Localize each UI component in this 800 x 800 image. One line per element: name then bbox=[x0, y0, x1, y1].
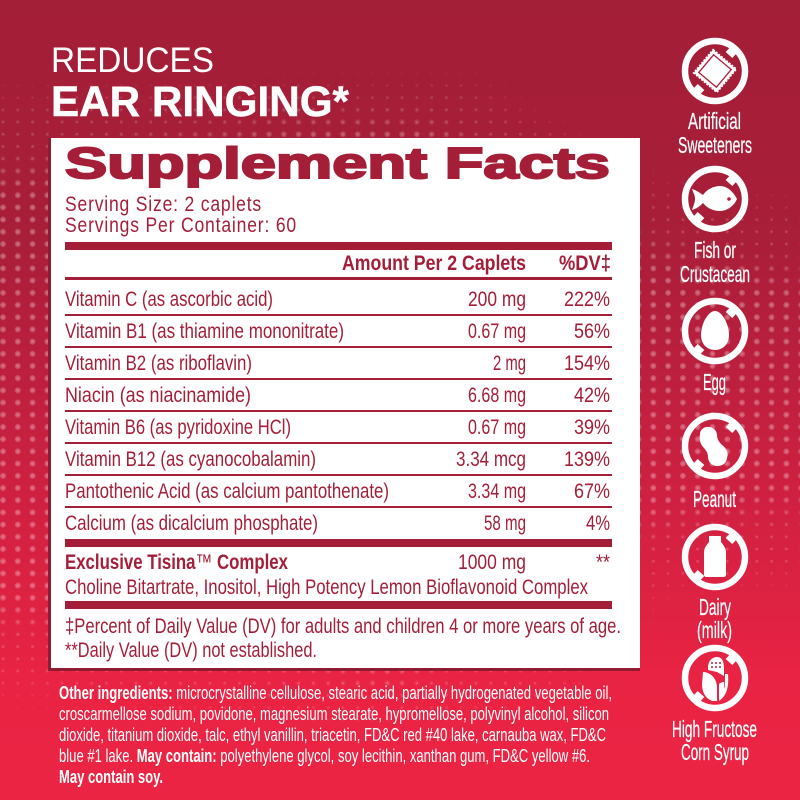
serving information: Serving Size: 2 caplets bbox=[65, 192, 262, 216]
footnotes: **Daily Value (DV) not established. bbox=[65, 638, 317, 662]
nutrient rows: 3.34 mg bbox=[468, 479, 526, 503]
complex row: 1000 mg bbox=[458, 550, 526, 574]
nutrient rows: Calcium (as dicalcium phosphate) bbox=[65, 511, 318, 535]
label: artificial sweeteners: Artificial bbox=[688, 108, 741, 134]
serving information bbox=[65, 192, 297, 237]
nutrient rows: 222% bbox=[564, 287, 610, 311]
nutrient rows: Vitamin C (as ascorbic acid) bbox=[65, 287, 273, 311]
nutrient rows: 2 mg bbox=[493, 351, 526, 375]
heading bbox=[51, 41, 349, 126]
nutrient rows: Pantothenic Acid (as calcium pantothenate) bbox=[65, 479, 389, 503]
nutrient rows: 67% bbox=[574, 479, 610, 503]
label: dairy (milk) bbox=[697, 594, 732, 643]
complex row: Choline Bitartrate, Inositol, High Potency Lemon Bioflavonoid Complex bbox=[65, 575, 588, 599]
label: peanut: Peanut bbox=[693, 486, 736, 512]
complex row: Exclusive Tisina™ Complex bbox=[65, 550, 288, 574]
complex row: ** bbox=[596, 550, 611, 574]
nutrient rows: 58 mg bbox=[484, 511, 526, 535]
complex row bbox=[65, 550, 611, 599]
heading: EAR RINGING* bbox=[51, 78, 349, 126]
footnotes bbox=[65, 614, 621, 662]
label: fish or crustacean bbox=[680, 237, 750, 287]
icon: no artificial sweeteners bbox=[685, 41, 745, 101]
nutrient rows: 42% bbox=[574, 383, 610, 407]
label: fish or crustacean: Crustacean bbox=[680, 261, 750, 287]
label: high fructose corn syrup bbox=[672, 716, 757, 765]
icon: no dairy bbox=[685, 527, 745, 587]
nutrient rows: 56% bbox=[574, 319, 610, 343]
nutrient rows: 6.68 mg bbox=[468, 383, 526, 407]
label: artificial sweeteners bbox=[678, 108, 752, 158]
nutrient rows: 3.34 mcg bbox=[456, 447, 526, 471]
panel title: Supplement Facts bbox=[65, 139, 610, 188]
icon: no high fructose corn syrup bbox=[685, 648, 745, 708]
nutrient rows: Vitamin B6 (as pyridoxine HCl) bbox=[65, 415, 291, 439]
nutrient rows: 200 mg bbox=[468, 287, 526, 311]
nutrient rows: Vitamin B2 (as riboflavin) bbox=[65, 351, 252, 375]
nutrient rows: Niacin (as niacinamide) bbox=[65, 383, 251, 407]
footnotes: ‡Percent of Daily Value (DV) for adults and children 4 or more years of age. bbox=[65, 614, 621, 638]
label: dairy (milk): (milk) bbox=[697, 617, 732, 643]
nutrient rows: Vitamin B1 (as thiamine mononitrate) bbox=[65, 319, 344, 343]
nutrient rows: 39% bbox=[574, 415, 610, 439]
icon: no fish or crustacean bbox=[685, 169, 745, 229]
nutrient rows: 0.67 mg bbox=[468, 415, 526, 439]
nutrient rows: 154% bbox=[564, 351, 610, 375]
table header: Amount Per 2 Caplets bbox=[342, 251, 526, 275]
panel: supplement facts bbox=[48, 138, 640, 671]
nutrient rows bbox=[65, 287, 612, 535]
nutrient rows: 0.67 mg bbox=[468, 319, 526, 343]
nutrient rows: 139% bbox=[564, 447, 610, 471]
label: high fructose corn syrup: Corn Syrup bbox=[681, 739, 749, 765]
label: egg: Egg bbox=[703, 369, 726, 395]
other ingredients text: blue #1 lake. May contain: polyethylene glycol, soy lecithin, xanthan gum, FD&C yellow #6. bbox=[59, 745, 590, 766]
icon: no egg bbox=[685, 301, 745, 361]
other ingredients text: May contain soy. bbox=[59, 766, 163, 787]
other ingredients text: Other ingredients: microcrystalline cellulose, stearic acid, partially hydrogenated vegetable oil, bbox=[59, 682, 612, 703]
label: artificial sweeteners: Sweeteners bbox=[678, 132, 752, 158]
label: dairy (milk): Dairy bbox=[699, 594, 731, 620]
serving information: Servings Per Container: 60 bbox=[65, 213, 297, 237]
nutrient rows: Vitamin B12 (as cyanocobalamin) bbox=[65, 447, 316, 471]
table header: %DV‡ bbox=[559, 251, 611, 275]
other ingredients text bbox=[59, 682, 612, 787]
nutrient rows: 4% bbox=[586, 511, 610, 535]
icon: no peanut bbox=[685, 416, 745, 476]
heading: REDUCES bbox=[51, 41, 214, 80]
label: fish or crustacean: Fish or bbox=[694, 237, 736, 263]
